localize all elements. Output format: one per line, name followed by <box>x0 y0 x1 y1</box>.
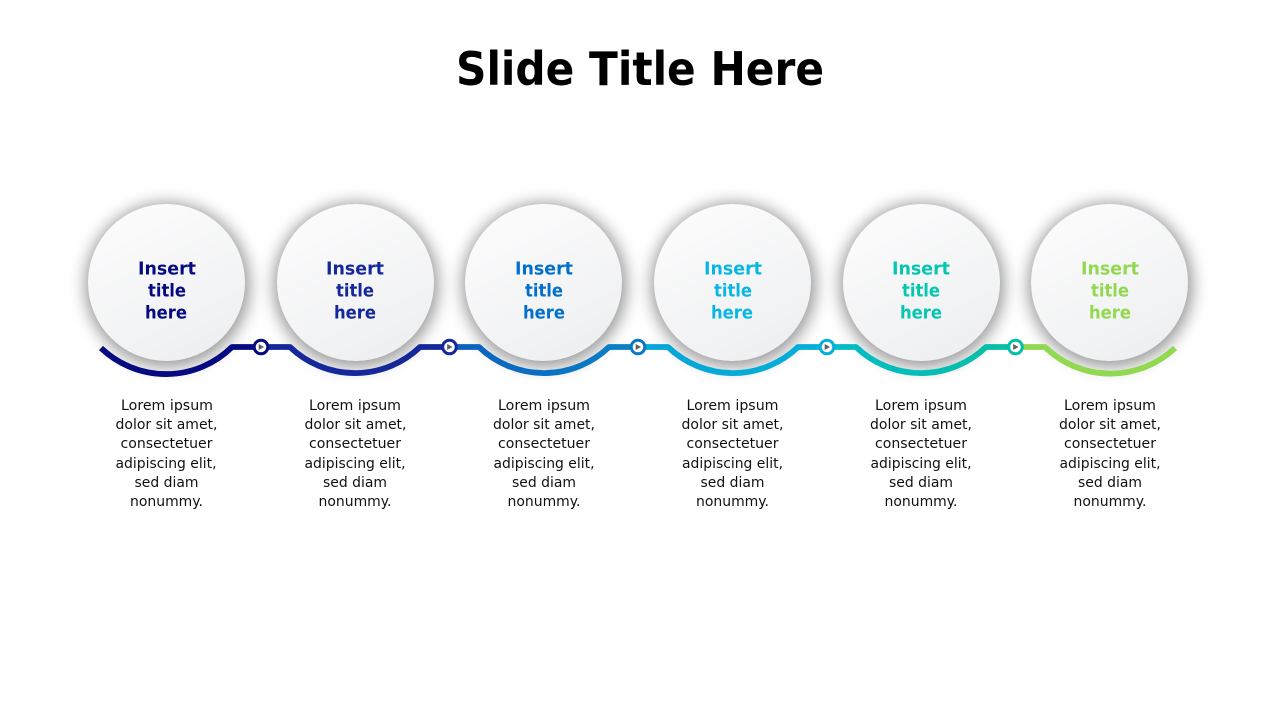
circle 2 title: here <box>334 302 376 324</box>
description 1: dolor sit amet, <box>116 417 218 433</box>
circle 6 title: here <box>1089 302 1131 324</box>
description 4: dolor sit amet, <box>682 417 784 433</box>
description 2: sed diam <box>323 475 387 491</box>
circle 4 title: Insert <box>704 258 762 280</box>
description 6: adipiscing elit, <box>1060 456 1160 472</box>
description 6: nonummy. <box>1074 494 1146 510</box>
description 2: Lorem ipsum <box>309 398 401 414</box>
connector line segment 5 <box>827 347 1016 373</box>
title: Slide Title Here <box>456 42 824 96</box>
description 2: dolor sit amet, <box>304 417 406 433</box>
description 1: nonummy. <box>130 494 203 510</box>
description 5: sed diam <box>889 475 953 491</box>
description 5: nonummy. <box>884 494 958 510</box>
circle 4 <box>652 203 816 367</box>
circle 1 title: Insert <box>138 258 196 280</box>
circle 3 title: Insert <box>515 258 573 280</box>
description 5: Lorem ipsum <box>875 398 967 414</box>
play node 4 <box>820 340 834 354</box>
circle 5 <box>840 203 1004 367</box>
description 1: Lorem ipsum <box>121 398 213 414</box>
description 1: consectetuer <box>120 436 213 452</box>
description 4: adipiscing elit, <box>682 456 783 472</box>
description 5: consectetuer <box>875 436 967 452</box>
circle 4 title: here <box>711 302 753 324</box>
description 3: sed diam <box>512 475 576 491</box>
connector line segment 3 <box>449 347 638 373</box>
description 4: consectetuer <box>686 436 779 452</box>
description 3: nonummy. <box>508 494 580 510</box>
description 4: nonummy. <box>696 494 769 510</box>
connector line segment 2 <box>261 347 449 373</box>
circle 5 title: title <box>902 280 940 302</box>
circle 2 title: Insert <box>326 258 384 280</box>
play node 3 <box>631 340 645 354</box>
connector line segment 4 <box>638 347 827 373</box>
circle 2 <box>274 203 438 367</box>
description 3: dolor sit amet, <box>493 417 595 433</box>
description 2: consectetuer <box>309 436 401 452</box>
description 1: adipiscing elit, <box>116 456 216 472</box>
description 6: consectetuer <box>1064 436 1156 452</box>
description 5: adipiscing elit, <box>870 456 972 472</box>
circle 1 <box>86 203 250 367</box>
description 4: Lorem ipsum <box>686 398 778 414</box>
connector line segment 1 <box>101 347 261 374</box>
description 2: nonummy. <box>318 494 392 510</box>
circle 3 <box>462 203 626 367</box>
description 3: Lorem ipsum <box>498 398 590 414</box>
description 1: sed diam <box>134 475 198 491</box>
circle 5 title: here <box>900 302 942 324</box>
circle 3 title: title <box>525 280 563 302</box>
description 3: adipiscing elit, <box>494 456 594 472</box>
description 4: sed diam <box>700 475 764 491</box>
connector line segment 6 <box>1016 347 1175 374</box>
description 2: adipiscing elit, <box>304 456 406 472</box>
play node 5 <box>1009 340 1022 354</box>
description 6: dolor sit amet, <box>1059 417 1161 433</box>
description 5: dolor sit amet, <box>870 417 972 433</box>
circle 2 title: title <box>336 280 374 302</box>
circle 6 title: Insert <box>1081 258 1139 280</box>
play node 1 <box>254 340 268 354</box>
circle 6 <box>1028 203 1192 367</box>
description 6: sed diam <box>1078 475 1142 491</box>
circle 5 title: Insert <box>892 258 950 280</box>
circle 4 title: title <box>714 280 752 302</box>
circle 3 title: here <box>523 302 565 324</box>
description 3: consectetuer <box>498 436 590 452</box>
play node 2 <box>443 340 456 354</box>
circle 1 title: title <box>148 280 186 302</box>
circle 1 title: here <box>145 302 187 324</box>
circle 6 title: title <box>1091 280 1129 302</box>
description 6: Lorem ipsum <box>1064 398 1156 414</box>
